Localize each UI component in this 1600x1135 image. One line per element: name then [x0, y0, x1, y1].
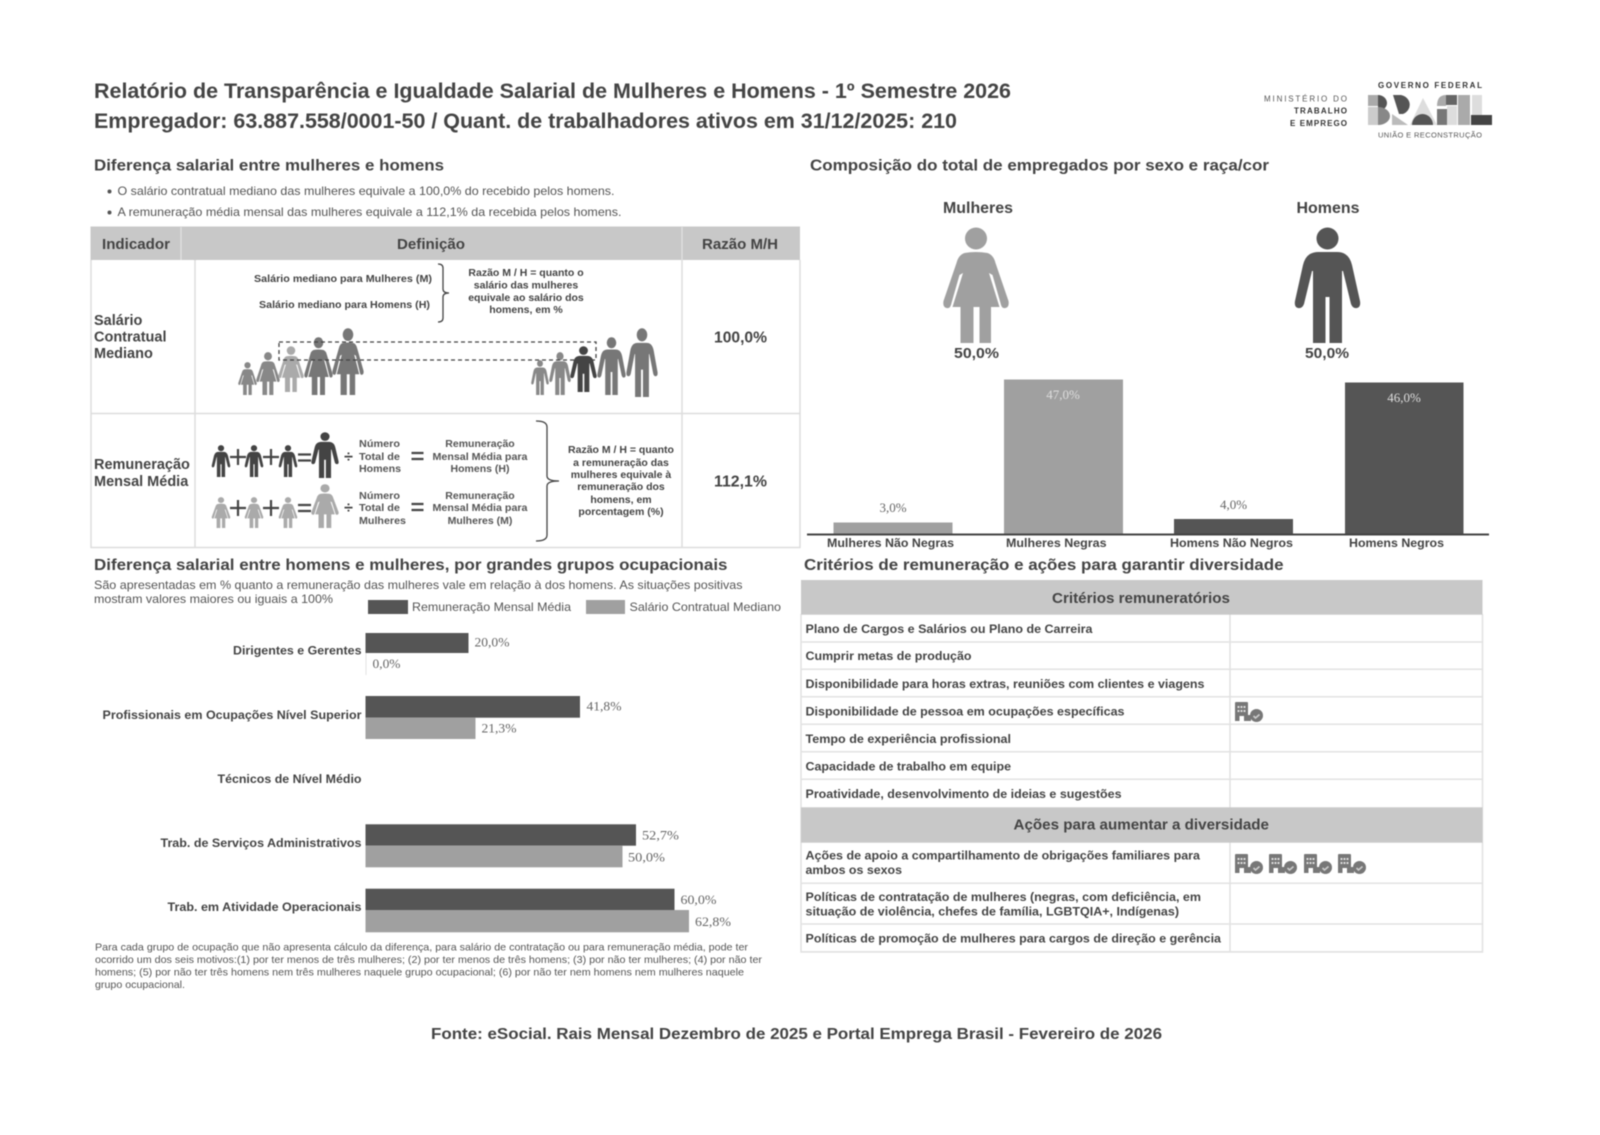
footnote: ocorrido um dos seis motivos:(1) por ter menos de três mulheres; (2) por ter menos de três homens; (3) por não ter mulheres; (4) por não ter — [95, 954, 763, 966]
row label — [94, 457, 190, 490]
definition text: Salário mediano para Homens (H) — [259, 299, 430, 311]
heading: Diferença salarial entre homens e mulheres, por grandes grupos ocupacionais — [94, 557, 728, 574]
group: atividade operacionais: 62,8% — [695, 914, 731, 929]
group: profissionais — [102, 696, 622, 739]
action rows: situação de violência, chefes de família, LGBTQIA+, Indígenas) — [806, 904, 1179, 918]
group: serviços administrativos: 52,7% — [642, 828, 679, 842]
footnote: Para cada grupo de ocupação que não apresenta cálculo da diferença, para salário de contratação ou para remuneração média, pode ter — [95, 942, 749, 954]
bar: mulheres negras — [1004, 380, 1123, 550]
bar: mulheres não negras: 3,0% — [879, 500, 907, 515]
table header — [90, 226, 800, 260]
axis — [807, 534, 1489, 536]
ratio explanation — [468, 267, 584, 316]
panel: critérios de remuneração e ações — [801, 557, 1482, 952]
brace — [536, 421, 559, 541]
ratio explanation — [568, 444, 674, 518]
legend — [368, 600, 781, 614]
icon: group of women — [238, 328, 364, 395]
formula: women: Mulheres — [359, 515, 406, 527]
ratio explanation: Razão M / H = quanto o — [468, 267, 584, 279]
action rows: Ações de apoio a compartilhamento de obrigações familiares para — [806, 848, 1200, 862]
heading: Composição do total de empregados por sexo e raça/cor — [810, 158, 1269, 174]
bullet text: A remuneração média mensal das mulheres equivale a 112,1% da recebida pelos homens. — [118, 205, 622, 219]
intro text — [94, 578, 742, 606]
logo text: ministério — [1264, 94, 1347, 128]
formula: women: Mensal Média para — [432, 502, 528, 514]
panel: composição do total de empregados — [807, 158, 1489, 550]
formula: men: Homens — [359, 463, 401, 475]
formula: men: Número — [359, 438, 400, 450]
action rows: Políticas de promoção de mulheres para cargos de direção e gerência — [806, 932, 1221, 946]
formula: women: Total de — [359, 502, 400, 514]
horizontal bar chart — [102, 633, 731, 932]
criteria rows: Capacidade de trabalho em equipe — [806, 760, 1011, 774]
ratio explanation: remuneração dos — [577, 481, 665, 493]
icon: group of men — [531, 328, 658, 397]
ratio explanation: homens, em % — [489, 304, 563, 316]
women figure — [943, 200, 1013, 362]
table grid — [91, 260, 800, 548]
criteria rows: Cumprir metas de produção — [806, 649, 972, 663]
bar: homens não negros: Homens Não Negros — [1170, 536, 1293, 550]
bar: homens não negros: 4,0% — [1220, 497, 1247, 512]
formula: women: Mulheres (M) — [448, 515, 512, 527]
legend: Remuneração Mensal Média — [412, 600, 571, 614]
definition text: Salário mediano para Mulheres (M) — [254, 273, 432, 285]
logo: ministério e governo federal — [1264, 81, 1492, 140]
bullet text — [108, 184, 622, 219]
women figure: Mulheres — [943, 200, 1013, 217]
logo tagline: UNIÃO E RECONSTRUÇÃO — [1378, 130, 1482, 140]
ratio explanation: mulheres equivale à — [571, 469, 671, 481]
row label: Remuneração — [94, 457, 190, 473]
bar: mulheres negras: Mulheres Negras — [1006, 536, 1107, 550]
footnote: grupo ocupacional. — [95, 979, 185, 991]
row label: Contratual — [94, 330, 166, 346]
bar: homens negros — [1345, 382, 1464, 550]
title — [94, 80, 1011, 133]
group: atividade operacionais: Trab. em Atividade Operacionais — [168, 900, 362, 914]
bar: mulheres não negras: Mulheres Não Negras — [827, 536, 954, 550]
criteria rows: Tempo de experiência profissional — [806, 732, 1011, 746]
group: serviços administrativos — [160, 824, 679, 867]
group: atividade operacionais — [168, 889, 731, 932]
value: 112,1% — [714, 474, 767, 490]
group: dirigentes e gerentes: Dirigentes e Gerentes — [233, 644, 362, 658]
ratio explanation: Razão M / H = quanto — [568, 444, 674, 456]
action rows — [806, 848, 1221, 946]
bar chart: race and sex — [807, 380, 1489, 550]
formula: men: ÷ — [344, 449, 353, 466]
group: dirigentes e gerentes: 0,0% — [372, 656, 401, 671]
formula: men: Homens (H) — [451, 463, 509, 475]
formula: men — [212, 432, 528, 478]
criteria rows — [806, 622, 1205, 801]
logo text: ministério: TRABALHO — [1294, 106, 1347, 116]
table header: Razão M/H — [702, 236, 778, 253]
legend: Salário Contratual Mediano — [630, 600, 781, 614]
header: critérios remuneratórios — [801, 580, 1482, 615]
dashed median box — [279, 342, 596, 360]
bar: mulheres negras: 47,0% — [1046, 387, 1080, 402]
group: técnicos: Técnicos de Nível Médio — [218, 772, 362, 786]
formula: men: Mensal Média para — [432, 451, 528, 463]
title: Empregador: 63.887.558/0001-50 / Quant. de trabalhadores ativos em 31/12/2025: 210 — [94, 110, 957, 133]
ratio explanation: salário das mulheres — [474, 280, 578, 292]
bar: mulheres não negras — [827, 500, 954, 550]
logo text: ministério: E EMPREGO — [1290, 119, 1347, 128]
row label — [94, 313, 166, 362]
group: profissionais: Profissionais em Ocupações Nível Superior — [102, 708, 362, 722]
definition text — [254, 273, 432, 311]
table grid — [801, 614, 1482, 952]
table header: Definição — [397, 236, 465, 253]
group: serviços administrativos: 50,0% — [628, 850, 665, 864]
heading: Critérios de remuneração e ações para garantir diversidade — [804, 557, 1284, 574]
men figure — [1295, 200, 1360, 362]
icons: company check row — [1235, 854, 1366, 874]
group: profissionais: 41,8% — [586, 698, 622, 714]
criteria rows: Plano de Cargos e Salários ou Plano de Carreira — [806, 622, 1093, 636]
ratio explanation: a remuneração das — [573, 457, 669, 469]
group: dirigentes e gerentes: 20,0% — [474, 634, 510, 650]
panel: diferença salarial entre mulheres e homens — [90, 158, 800, 548]
panel: diferença salarial por grupos ocupacionais — [94, 557, 781, 991]
group: atividade operacionais: 60,0% — [680, 892, 717, 907]
formula: women: Remuneração — [445, 490, 515, 502]
header: critérios remuneratórios: Critérios remuneratórios — [1052, 591, 1230, 607]
women figure: 50,0% — [954, 345, 999, 362]
group: serviços administrativos: Trab. de Serviços Administrativos — [160, 836, 362, 850]
bullet text: O salário contratual mediano das mulheres equivale a 100,0% do recebido pelos homens. — [118, 184, 614, 198]
intro text: mostram valores maiores ou iguais a 100% — [94, 592, 333, 606]
bar: homens negros: Homens Negros — [1349, 536, 1444, 550]
group: profissionais: 21,3% — [482, 720, 517, 736]
bar: homens negros: 46,0% — [1387, 390, 1421, 405]
row: salário contratual mediano — [94, 264, 767, 397]
header: ações para aumentar a diversidade — [801, 807, 1482, 843]
ratio explanation: homens, em — [590, 494, 652, 506]
row: remuneração mensal média — [94, 421, 767, 541]
action rows: Políticas de contratação de mulheres (negras, com deficiência, em — [806, 890, 1201, 904]
icon: company check — [1235, 702, 1263, 722]
group: dirigentes e gerentes — [233, 633, 510, 675]
criteria rows: Disponibilidade para horas extras, reuniões com clientes e viagens — [806, 677, 1205, 691]
table header: Indicador — [102, 236, 170, 253]
logo heading: governo federal: GOVERNO FEDERAL — [1378, 81, 1482, 90]
bar: homens não negros — [1170, 497, 1293, 550]
heading: Diferença salarial entre mulheres e homens — [94, 158, 444, 174]
logo text: ministério: MINISTÉRIO DO — [1264, 94, 1347, 104]
brace — [438, 264, 449, 322]
criteria rows: Disponibilidade de pessoa em ocupações específicas — [806, 704, 1125, 718]
men figure: Homens — [1296, 200, 1360, 217]
title: Relatório de Transparência e Igualdade Salarial de Mulheres e Homens - 1º Semestre 2026 — [94, 80, 1011, 103]
ratio explanation: equivale ao salário dos — [468, 292, 584, 304]
row label: Mediano — [94, 346, 153, 362]
intro text: São apresentadas em % quanto a remuneração das mulheres vale em relação à dos homens. As situações positivas — [94, 578, 742, 592]
formula: women: Número — [359, 490, 400, 502]
criteria rows: Proatividade, desenvolvimento de ideias e sugestões — [806, 787, 1122, 801]
source note: Fonte: eSocial. Rais Mensal Dezembro de 2025 e Portal Emprega Brasil - Fevereiro de 2026 — [431, 1026, 1162, 1043]
footnote: homens; (5) por não ter três homens nem três mulheres naquele grupo ocupacional; (6) por não ter nem homens nem mulheres naquele — [95, 966, 744, 978]
formula: men: Remuneração — [445, 438, 515, 450]
logo shapes: brasil — [1368, 95, 1492, 125]
formula: men: Total de — [359, 451, 400, 463]
formula: women: ÷ — [344, 500, 353, 517]
men figure: 50,0% — [1305, 345, 1349, 362]
row label: Mensal Média — [94, 474, 189, 490]
row label: Salário — [94, 313, 142, 329]
formula: women — [212, 484, 528, 528]
ratio explanation: porcentagem (%) — [578, 506, 664, 518]
footnote — [95, 942, 763, 991]
action rows: ambos os sexos — [806, 863, 902, 877]
value: 100,0% — [714, 330, 767, 346]
header: ações para aumentar a diversidade: Ações para aumentar a diversidade — [1014, 818, 1269, 834]
